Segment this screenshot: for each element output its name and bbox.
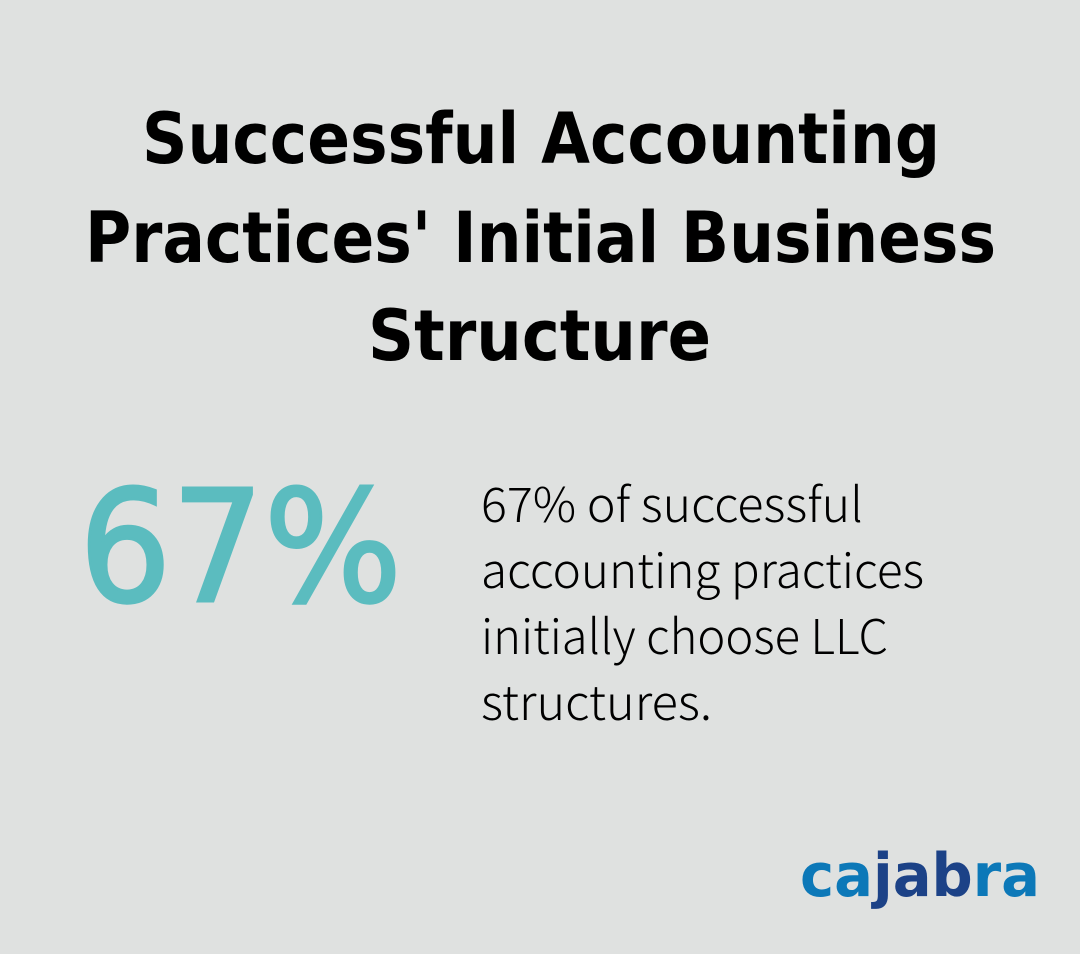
title: Structure (368, 295, 711, 377)
title (85, 98, 996, 377)
description text: initially choose LLC (481, 598, 888, 668)
big statistic: 67%: 67% (79, 457, 402, 638)
description text: 67% of successful (481, 466, 863, 536)
description text: accounting practices (481, 532, 924, 602)
description text (481, 466, 924, 734)
title: Successful Accounting (142, 98, 940, 180)
description text: structures. (481, 664, 712, 734)
title: Practices' Initial Business (85, 197, 996, 279)
logo: cajabra: cajabra (800, 841, 1040, 911)
